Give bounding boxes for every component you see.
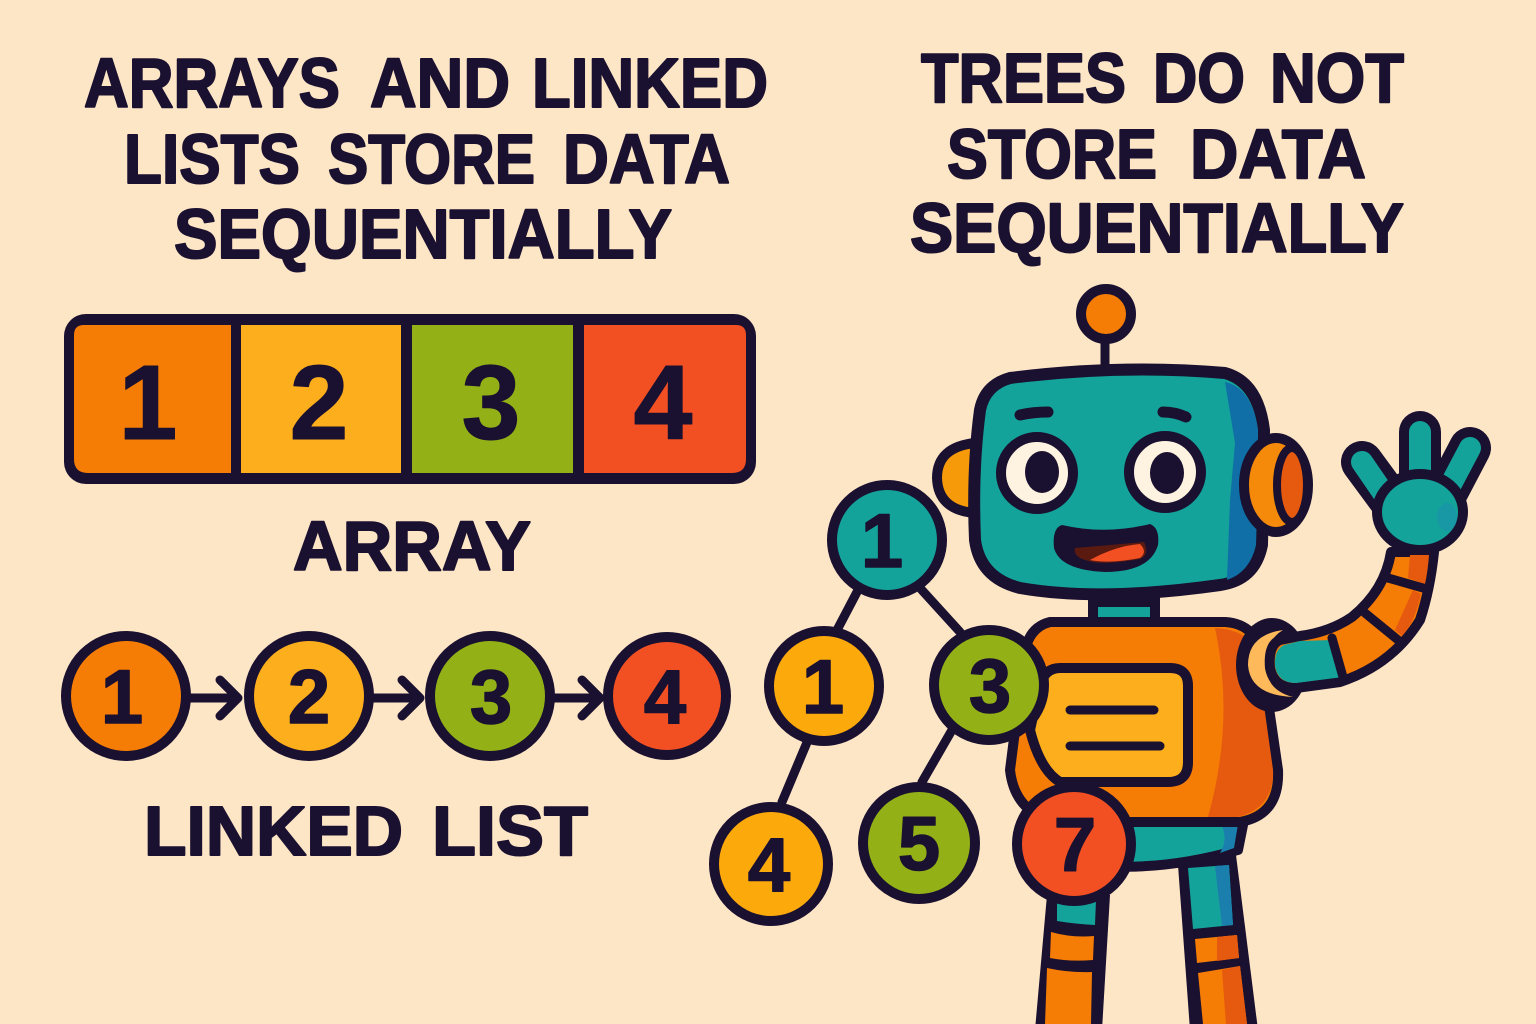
robot hand xyxy=(1362,432,1470,550)
robot right ear xyxy=(1244,438,1308,532)
tree diagram: 3 xyxy=(969,644,1011,729)
heading: arrays and linked lists: STORE xyxy=(328,120,535,198)
robot xyxy=(937,289,1470,1024)
heading: trees: STORE xyxy=(947,115,1157,193)
heading: trees: DO xyxy=(1153,39,1245,117)
robot left ear xyxy=(937,443,975,513)
tree diagram xyxy=(714,485,1131,921)
robot right leg xyxy=(1178,855,1258,1024)
heading: arrays and linked lists xyxy=(84,44,768,273)
array diagram: 4 xyxy=(634,344,693,462)
linked list diagram: 1 xyxy=(101,655,143,740)
tree diagram: 7 xyxy=(1054,803,1096,888)
linked list diagram xyxy=(66,636,726,756)
linked list diagram: 2 xyxy=(288,655,330,740)
robot mouth xyxy=(1054,524,1158,572)
label: linked list: LINKED xyxy=(144,792,403,870)
tree diagram: 5 xyxy=(898,802,940,887)
heading: trees xyxy=(910,39,1404,267)
label: linked list xyxy=(144,792,588,870)
heading: arrays and linked lists: DATA xyxy=(563,120,730,198)
array diagram: 3 xyxy=(462,344,520,462)
robot neck xyxy=(1088,590,1160,626)
robot waist xyxy=(1090,815,1245,867)
tree diagram: 4 xyxy=(748,823,790,908)
tree diagram: 1 xyxy=(802,645,844,730)
label: array: ARRAY xyxy=(293,507,531,585)
linked list diagram: 4 xyxy=(644,655,686,740)
heading: arrays and linked lists: ARRAYS xyxy=(84,44,340,122)
robot raised arm xyxy=(1270,552,1434,688)
heading: arrays and linked lists: LISTS xyxy=(124,120,300,198)
array diagram: 1 xyxy=(119,344,177,462)
heading: arrays and linked lists: SEQUENTIALLY xyxy=(174,195,672,273)
robot shoulder xyxy=(1236,618,1308,712)
heading: trees: SEQUENTIALLY xyxy=(910,189,1404,267)
robot body xyxy=(1010,622,1278,822)
heading: trees: NOT xyxy=(1270,39,1404,117)
robot head xyxy=(974,369,1264,594)
heading: arrays and linked lists: AND xyxy=(370,44,510,122)
array diagram: 2 xyxy=(290,344,348,462)
label: linked list: LIST xyxy=(432,792,588,870)
robot antenna xyxy=(1081,289,1131,368)
heading: trees: TREES xyxy=(921,39,1126,117)
robot eyes xyxy=(1001,436,1201,509)
robot left leg xyxy=(1035,895,1110,1024)
tree diagram: 1 xyxy=(861,499,903,584)
robot eyebrows xyxy=(1020,412,1186,417)
heading: arrays and linked lists: LINKED xyxy=(532,44,768,122)
heading: trees: DATA xyxy=(1190,115,1366,193)
array diagram xyxy=(64,314,756,484)
linked list diagram: 3 xyxy=(470,655,512,740)
